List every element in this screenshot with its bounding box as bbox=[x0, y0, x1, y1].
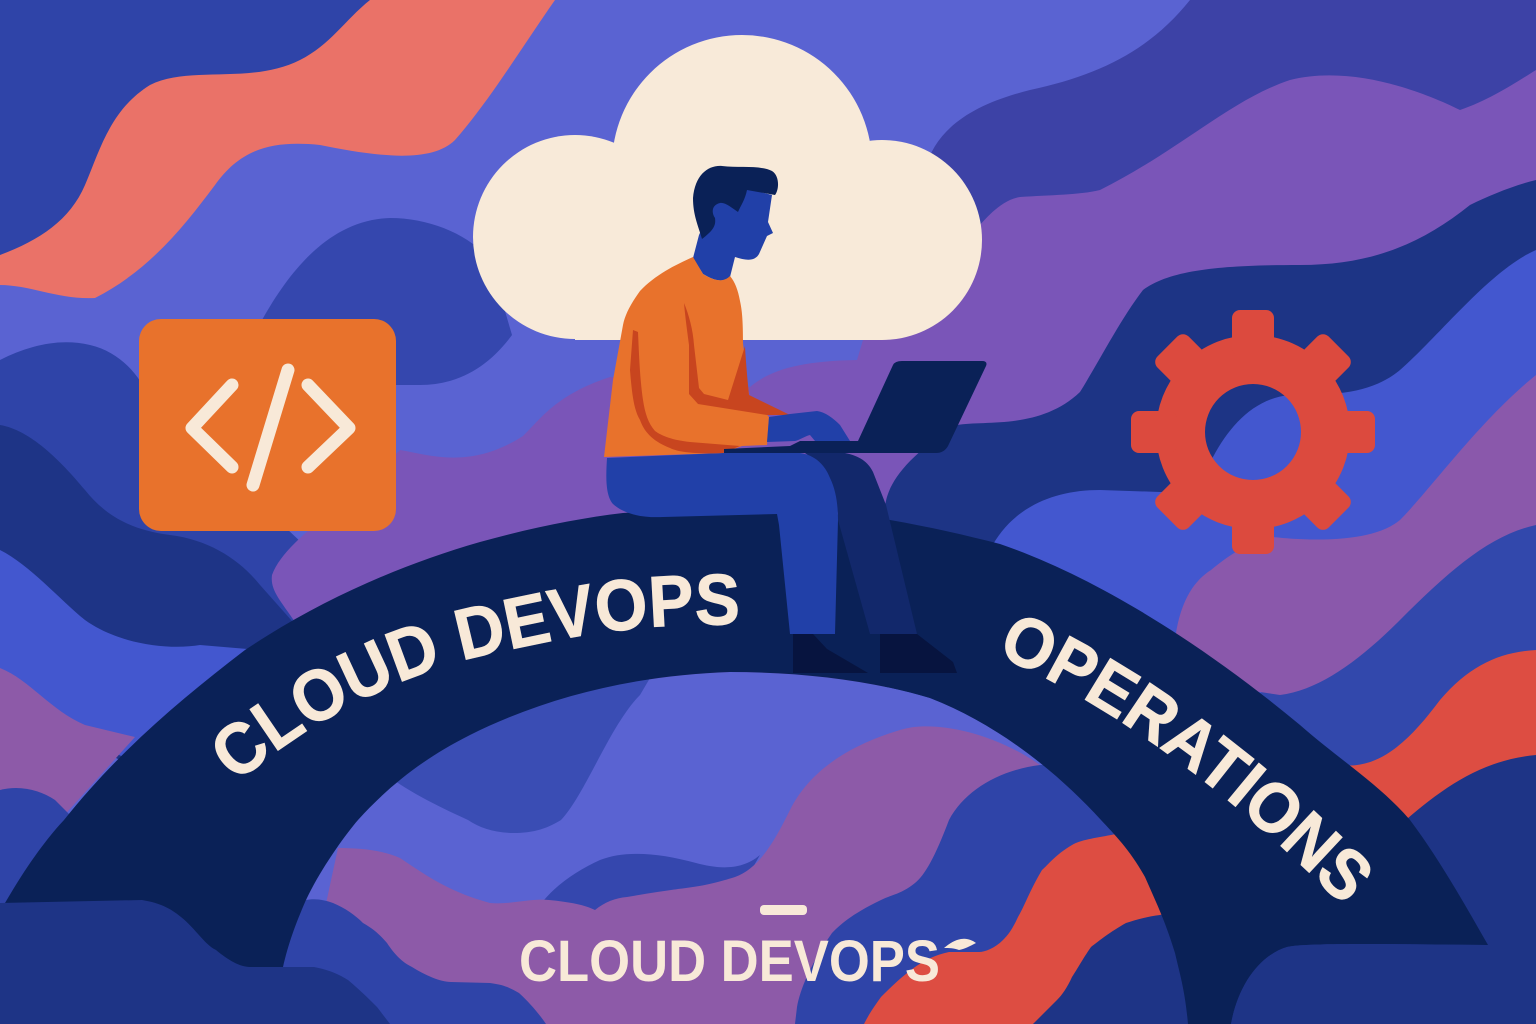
bottom caption: CLOUD DEVOPS bbox=[519, 929, 940, 994]
shirt bbox=[604, 257, 769, 457]
arch label: cloud devops: CLOUD DEVOPS bbox=[215, 574, 738, 774]
face and neck bbox=[693, 188, 773, 280]
shirt shadow: back bbox=[630, 330, 740, 453]
front leg bbox=[606, 453, 838, 634]
laptop bbox=[724, 361, 986, 453]
bottom-right foreground wave bbox=[1231, 944, 1536, 1024]
forearm bbox=[767, 411, 850, 442]
hair bbox=[693, 166, 778, 239]
bottom-left foreground wave bbox=[0, 900, 390, 1024]
icon: gear bbox=[1131, 310, 1375, 554]
shirt shadow: arm bbox=[684, 303, 790, 415]
icon: code window bbox=[139, 319, 396, 531]
figure: person with laptop bbox=[604, 166, 986, 673]
icon: cloud bbox=[473, 35, 982, 340]
back leg bbox=[805, 453, 917, 634]
arch bridge bbox=[5, 510, 1488, 1024]
under-arch wave layers bbox=[250, 672, 1200, 1024]
shoes bbox=[793, 634, 957, 673]
arch label: operations: OPERATIONS bbox=[1005, 618, 1370, 900]
